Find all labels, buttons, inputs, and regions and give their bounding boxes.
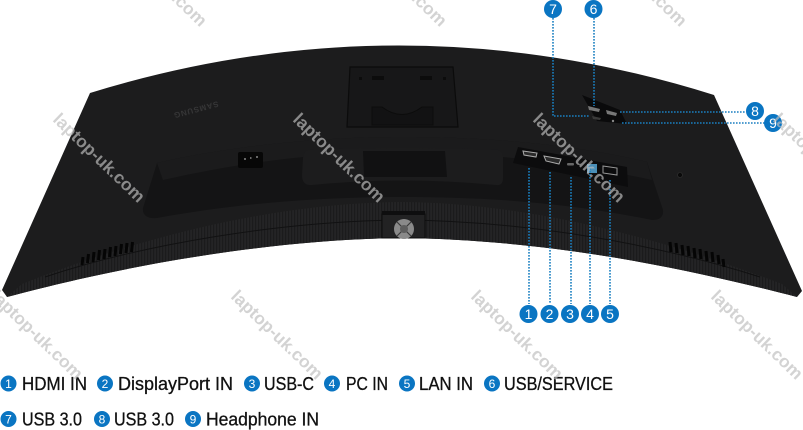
watermark row 3: laptop-uk.com xyxy=(227,286,327,383)
legend item 3: USB-C xyxy=(264,374,314,394)
band crease line xyxy=(45,220,760,277)
watermark row 2: laptop-uk.com xyxy=(529,109,629,206)
socket frame xyxy=(238,152,263,168)
badge 8 xyxy=(746,102,764,120)
watermark row 3: laptop-uk.com xyxy=(467,286,567,383)
badge 7: 7 xyxy=(549,1,557,17)
USB-C port xyxy=(567,163,574,166)
legend item 5: LAN IN xyxy=(419,374,473,394)
watermark row 2: laptop-uk.com xyxy=(49,109,149,206)
badge 7 xyxy=(544,0,562,18)
watermark row 2: laptop-uk.com xyxy=(289,109,389,206)
leader 6 xyxy=(593,18,595,106)
mount top slots xyxy=(372,76,432,80)
mount screw holes xyxy=(359,77,446,80)
legend item 4 xyxy=(324,374,388,394)
legend item 8: 8 xyxy=(99,412,106,426)
PC IN port xyxy=(587,164,597,173)
joystick control xyxy=(382,211,425,239)
callout badges xyxy=(520,0,782,323)
monitor body xyxy=(2,45,802,297)
centre block xyxy=(302,148,503,185)
centre dark panel xyxy=(363,151,447,177)
leader 7 xyxy=(553,18,590,116)
legend item 4: PC IN xyxy=(346,374,388,394)
ribbed lower band xyxy=(7,202,797,297)
left vents xyxy=(82,242,132,265)
watermark row 2 xyxy=(49,109,803,206)
joystick housing xyxy=(382,214,425,238)
right vents xyxy=(670,242,724,267)
rear screw hole xyxy=(678,172,682,178)
watermark row 1 xyxy=(111,0,691,30)
legend item 3: 3 xyxy=(249,377,256,391)
badge 4: 4 xyxy=(586,306,594,322)
badge 4 xyxy=(581,305,599,323)
panel plate xyxy=(513,147,628,187)
legend item 7: USB 3.0 xyxy=(22,410,82,430)
leader 9 xyxy=(622,122,765,124)
legend xyxy=(0,374,613,430)
badge 8: 8 xyxy=(751,103,759,119)
cavity upper ledge xyxy=(157,137,652,180)
badge 2 xyxy=(540,305,558,323)
callout leader lines xyxy=(529,18,765,304)
icon: power socket xyxy=(238,152,263,168)
legend item 3 xyxy=(244,374,314,394)
legend item 4: 4 xyxy=(329,377,336,391)
badge 9: 9 xyxy=(769,115,777,131)
joystick button xyxy=(394,219,414,239)
badge 9 xyxy=(764,114,782,132)
badge 1 xyxy=(520,305,538,323)
USB upper right xyxy=(606,110,617,116)
joystick centre xyxy=(400,225,408,233)
legend item 7: 7 xyxy=(5,412,12,426)
LAN port xyxy=(603,166,617,175)
upper plate xyxy=(582,95,627,124)
monitor rear xyxy=(2,45,802,297)
stand mount xyxy=(347,67,458,127)
leader 3 xyxy=(570,177,572,304)
legend item 1: HDMI IN xyxy=(22,374,87,394)
legend item 8: USB 3.0 xyxy=(114,410,174,430)
upper port panel xyxy=(582,95,627,124)
legend item 7 xyxy=(0,410,82,430)
joystick divider xyxy=(397,222,411,236)
legend item 6: 6 xyxy=(489,377,496,391)
badge 6 xyxy=(584,0,602,18)
leader 8 xyxy=(620,111,746,113)
joystick top strip xyxy=(382,211,425,215)
legend item 9: Headphone IN xyxy=(206,410,319,430)
logo: faint upside-down brand: SAMSUNG xyxy=(172,99,219,120)
leader 2 xyxy=(549,172,551,304)
legend item 8 xyxy=(94,410,174,430)
mount plate xyxy=(347,67,458,127)
badge 3 xyxy=(561,305,579,323)
legend item 2: 2 xyxy=(102,377,109,391)
legend item 1: 1 xyxy=(5,377,12,391)
leader 1 xyxy=(528,168,530,304)
badge 2: 2 xyxy=(546,306,554,322)
badge 1: 1 xyxy=(525,306,533,322)
mount lower bracket xyxy=(372,107,433,125)
leader 5 xyxy=(609,180,611,304)
DisplayPort port xyxy=(544,156,561,164)
legend item 5 xyxy=(399,374,473,394)
lower port panel xyxy=(513,147,628,187)
leader 4 xyxy=(589,168,591,304)
USB service port xyxy=(588,106,600,112)
watermark row 3 xyxy=(0,286,803,383)
badge 3: 3 xyxy=(566,306,574,322)
badge 5 xyxy=(601,305,619,323)
recessed rear cavity xyxy=(143,137,663,220)
legend item 2: DisplayPort IN xyxy=(118,374,233,394)
legend item 9: 9 xyxy=(190,412,197,426)
legend item 5: 5 xyxy=(404,377,411,391)
badge 6: 6 xyxy=(590,1,598,17)
USB lower xyxy=(592,116,601,120)
badge 5: 5 xyxy=(606,306,614,322)
socket pins xyxy=(244,156,258,160)
HDMI port xyxy=(523,151,537,157)
legend item 6: USB/SERVICE xyxy=(504,374,613,394)
headphone jack xyxy=(612,120,614,122)
